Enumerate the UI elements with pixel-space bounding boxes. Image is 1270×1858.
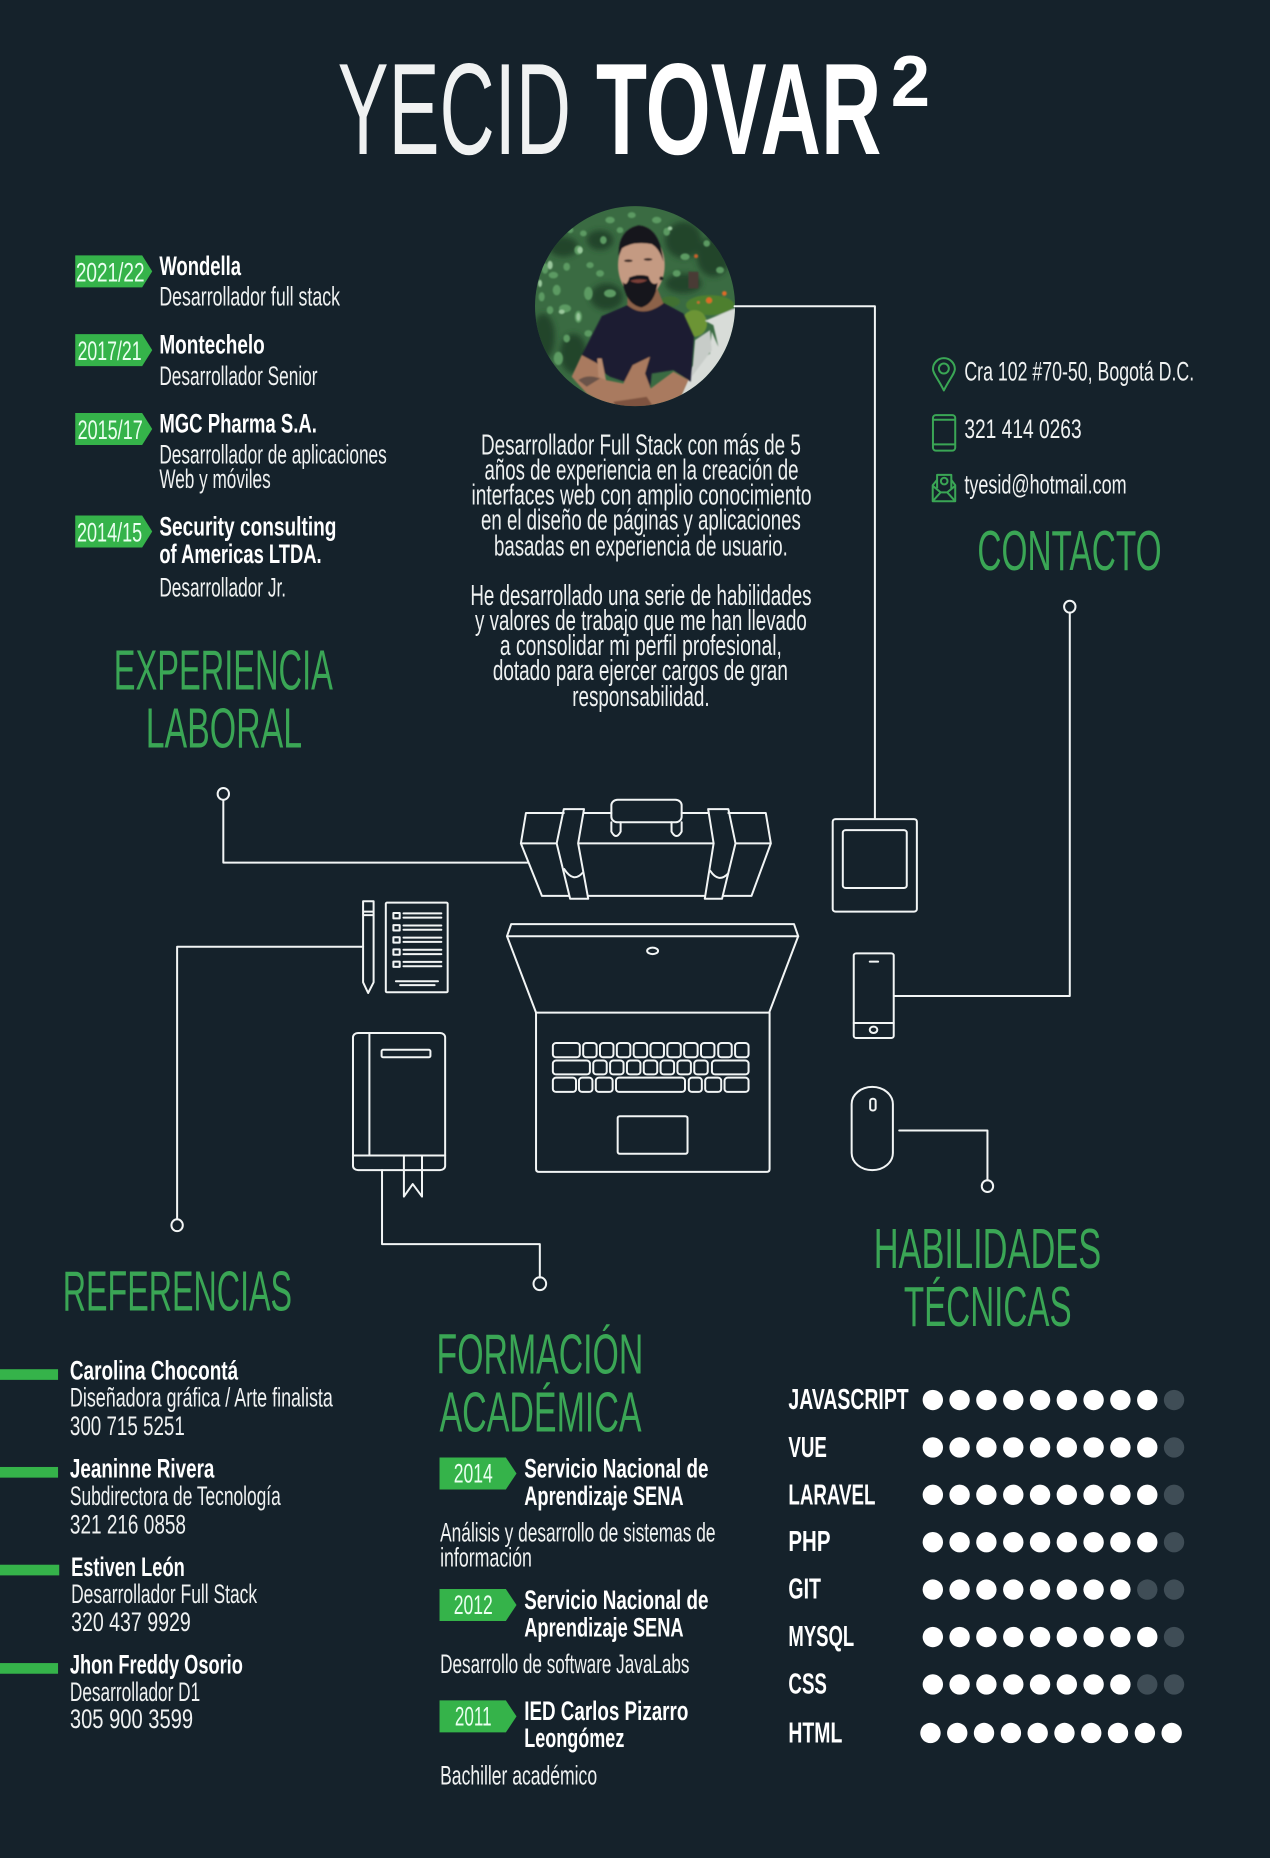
skill: javascript	[788, 1384, 1184, 1416]
education: 2011: IED Carlos Pizarro	[524, 1695, 688, 1726]
skill: laravel: LARAVEL	[788, 1479, 875, 1511]
reference: Estiven León: 320 437 9929	[71, 1606, 191, 1637]
connector: photo to tablet	[735, 306, 875, 819]
experience entry: Security consulting: 2014/15	[77, 517, 142, 548]
education: 2011: Leongómez	[524, 1722, 624, 1753]
biography text	[470, 430, 812, 713]
connector: experiencia to briefcase	[218, 788, 528, 863]
experience entry: Wondella: Wondella	[159, 250, 242, 281]
connector: notebook to formacion	[382, 1170, 546, 1290]
icon: envelope	[933, 475, 955, 501]
experience entry: Security consulting: of Americas LTDA.	[159, 538, 322, 569]
experience entry: MGC Pharma: MGC Pharma S.A.	[159, 408, 317, 439]
experience entry: Montechelo	[75, 329, 318, 391]
heading: habilidades tecnicas: HABILIDADES	[874, 1218, 1101, 1281]
person	[572, 225, 694, 408]
biography text: He desarrollado una serie de habilidades	[470, 580, 812, 612]
skill: html: HTML	[788, 1717, 842, 1749]
title: YECID	[338, 36, 571, 182]
reference: Jeaninne Rivera: 321 216 0858	[70, 1508, 186, 1539]
education: 2014: Servicio Nacional de	[524, 1453, 708, 1484]
reference: Jhon Freddy Osorio: Desarrollador D1	[70, 1676, 200, 1707]
education: 2011	[440, 1695, 688, 1791]
skill: vue	[788, 1432, 1184, 1464]
icon: briefcase	[521, 800, 771, 899]
skill: php: PHP	[788, 1526, 830, 1558]
reference: Carolina Chocontá: Diseñadora gráfica / Arte finalista	[70, 1382, 333, 1413]
phone number: 321 414 0263	[964, 413, 1082, 444]
heading: experiencia laboral: LABORAL	[146, 698, 302, 761]
education: 2014: información	[440, 1541, 532, 1573]
hedge and planter	[660, 254, 740, 397]
icon: location pin	[933, 358, 955, 390]
icon: mouse	[852, 1087, 893, 1170]
biography text: dotado para ejercer cargos de gran	[493, 655, 788, 687]
heading: formacion academica: FORMACIÓN	[437, 1323, 643, 1386]
panel: experiencia laboral	[75, 250, 387, 761]
heading: experiencia laboral	[114, 640, 333, 761]
experience entry: Security consulting: Desarrollador Jr.	[159, 572, 286, 603]
education: 2011: 2011	[455, 1700, 492, 1731]
skill: css: CSS	[788, 1668, 827, 1700]
connector: mouse to habilidades	[899, 1130, 993, 1192]
connector: contacto to phone	[894, 601, 1075, 996]
education: 2014: Análisis y desarrollo de sistemas de	[440, 1517, 716, 1548]
icon: notebook	[353, 1033, 445, 1197]
biography text: basadas en experiencia de usuario.	[494, 530, 788, 562]
experience entry: Wondella: Desarrollador full stack	[159, 281, 340, 312]
reference: Jeaninne Rivera: Jeaninne Rivera	[70, 1453, 215, 1484]
reference: Estiven León: Estiven León	[71, 1551, 185, 1582]
biography text: a consolidar mi perfil profesional,	[500, 630, 782, 662]
experience entry: Montechelo: 2017/21	[78, 335, 142, 366]
education: 2011: Bachiller académico	[440, 1760, 597, 1791]
biography text: y valores de trabajo que me han llevado	[475, 605, 807, 637]
skill: javascript: JAVASCRIPT	[788, 1384, 909, 1416]
connector: referencias to pencil	[171, 947, 363, 1231]
reference: Estiven León	[0, 1551, 257, 1637]
experience entry: MGC Pharma: 2015/17	[78, 414, 143, 445]
skill: css	[788, 1668, 1184, 1700]
skill: php	[788, 1526, 1184, 1558]
skill: vue: VUE	[788, 1432, 827, 1464]
skill: mysql	[788, 1621, 1184, 1653]
education: 2014: 2014	[454, 1457, 493, 1488]
education: 2012	[440, 1584, 708, 1679]
biography text: responsabilidad.	[572, 681, 710, 713]
icon: smartphone	[854, 953, 894, 1038]
reference: Carolina Chocontá: Carolina Chocontá	[70, 1354, 239, 1385]
biography text: interfaces web con amplio conocimiento	[472, 479, 812, 511]
heading: experiencia laboral: EXPERIENCIA	[114, 640, 333, 703]
education: 2012: Desarrollo de software JavaLabs	[440, 1648, 689, 1679]
reference: Carolina Chocontá: 300 715 5251	[70, 1410, 185, 1441]
education: 2014	[440, 1453, 716, 1573]
reference: Jeaninne Rivera: Subdirectora de Tecnología	[70, 1480, 281, 1511]
icon: mobile phone	[933, 415, 955, 451]
email: tyesid@hotmail.com	[964, 469, 1127, 500]
reference: Jhon Freddy Osorio	[0, 1649, 243, 1734]
profile photo	[530, 203, 743, 410]
panel: formacion academica	[437, 1323, 716, 1791]
education: 2012: 2012	[454, 1589, 493, 1620]
biography text: en el diseño de páginas y aplicaciones	[481, 504, 801, 536]
skill: mysql: MYSQL	[788, 1621, 854, 1653]
heading: formacion academica	[437, 1323, 643, 1444]
experience entry: Security consulting: Security consulting	[159, 511, 336, 542]
biography text: Desarrollador Full Stack con más de 5	[481, 430, 801, 462]
experience entry: MGC Pharma	[75, 408, 387, 494]
heading: formacion academica: ACADÉMICA	[440, 1381, 642, 1444]
experience entry: Wondella	[75, 250, 340, 312]
biography text: años de experiencia en la creación de	[485, 455, 798, 487]
panel: contacto	[933, 355, 1194, 583]
skill: laravel	[788, 1479, 1184, 1511]
experience entry: Wondella: 2021/22	[76, 256, 145, 287]
icon: pencil	[363, 901, 374, 993]
reference: Estiven León: Desarrollador Full Stack	[71, 1578, 257, 1609]
reference: Jhon Freddy Osorio: Jhon Freddy Osorio	[70, 1649, 243, 1680]
reference: Jeaninne Rivera	[0, 1453, 281, 1539]
icon: laptop	[507, 924, 798, 1172]
title: TOVAR	[596, 36, 881, 182]
reference: Jhon Freddy Osorio: 305 900 3599	[70, 1703, 193, 1734]
skill: html	[788, 1717, 1182, 1749]
panel: habilidades tecnicas	[788, 1218, 1184, 1749]
education: 2012: Servicio Nacional de	[524, 1584, 708, 1615]
heading: habilidades tecnicas	[874, 1218, 1101, 1339]
experience entry: Security consulting	[75, 511, 336, 603]
icon: checklist	[386, 903, 448, 992]
line icons group	[353, 800, 917, 1290]
icon: tablet	[833, 819, 917, 912]
experience entry: Montechelo: Montechelo	[159, 329, 265, 360]
education: 2012: Aprendizaje SENA	[524, 1611, 684, 1642]
education: 2014: Aprendizaje SENA	[524, 1480, 684, 1511]
skill: git	[788, 1573, 1184, 1605]
title	[338, 36, 930, 182]
reference: Carolina Chocontá	[0, 1354, 333, 1441]
panel: referencias	[0, 1261, 333, 1734]
experience entry: MGC Pharma: Desarrollador de aplicaciones	[159, 438, 387, 469]
experience entry: MGC Pharma: Web y móviles	[159, 463, 271, 494]
heading: habilidades tecnicas: TÉCNICAS	[904, 1276, 1072, 1339]
heading: referencias: REFERENCIAS	[63, 1261, 292, 1324]
skill: git: GIT	[788, 1573, 821, 1605]
title: 2	[891, 42, 930, 122]
experience entry: Montechelo: Desarrollador Senior	[159, 360, 318, 391]
